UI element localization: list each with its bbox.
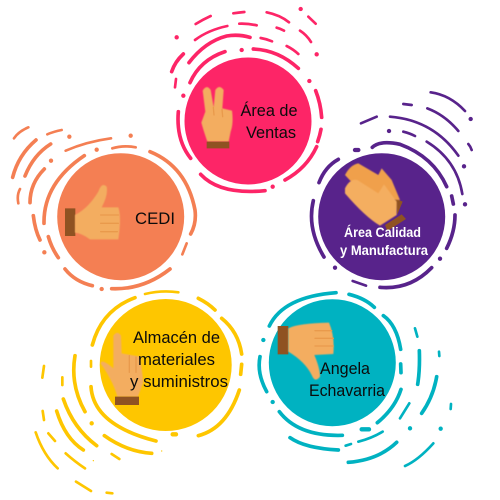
icon: clapping hands — [345, 163, 406, 231]
label: Angela Echavarria: Echavarria — [309, 382, 386, 400]
label: Almacén de materiales y suministros: materiales — [138, 351, 215, 369]
panel: Almacén de materiales y suministros — [36, 291, 242, 493]
panel: Angela Echavarria — [259, 293, 451, 466]
icon: thumbs up — [65, 185, 120, 239]
pink swirl strokes — [172, 9, 322, 191]
yellow circle — [100, 299, 232, 431]
teal circle — [269, 299, 396, 426]
label: Almacén de materiales y suministros: y suministros — [130, 373, 228, 391]
label: Angela Echavarria: Angela — [320, 360, 371, 378]
purple circle — [318, 153, 445, 280]
orange circle — [57, 153, 184, 280]
label: Almacén de materiales y suministros: Almacén de — [133, 329, 220, 347]
label: Área Calidad y Manufactura: y Manufactura — [340, 242, 428, 258]
panel: Área Calidad y Manufactura — [311, 92, 472, 288]
label: Área Calidad y Manufactura — [340, 224, 428, 258]
pink circle — [184, 58, 312, 184]
icon: pointing hand — [101, 333, 143, 405]
label: Almacén de materiales y suministros — [130, 329, 228, 391]
icon: thumbs down — [278, 323, 334, 380]
purple swirl strokes — [311, 92, 472, 288]
panel: Área de Ventas — [172, 9, 322, 191]
label: Área de Ventas — [240, 101, 298, 142]
orange swirl strokes — [13, 127, 195, 289]
label: CEDI: CEDI — [135, 210, 175, 228]
label: Angela Echavarria — [309, 360, 386, 400]
icon: peace hand — [201, 87, 233, 148]
panel: CEDI — [13, 127, 195, 289]
teal swirl strokes — [259, 293, 451, 466]
label: Área de Ventas: Ventas — [246, 124, 296, 142]
yellow swirl strokes — [36, 291, 242, 493]
label: Área Calidad y Manufactura: Área Calidad — [344, 224, 421, 240]
label: Área de Ventas: Área de — [240, 101, 298, 120]
